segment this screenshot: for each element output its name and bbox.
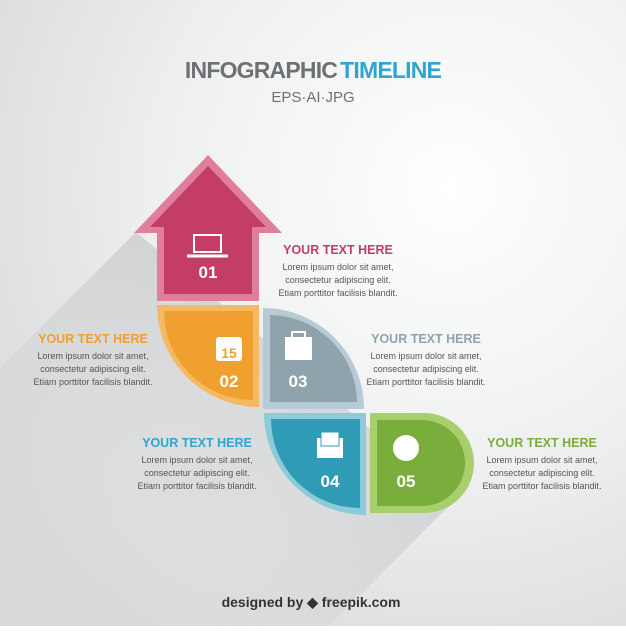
text 02: Etiam porttitor facilisis blandit. [33,377,153,387]
title [185,57,442,106]
step 05: 05 [397,472,415,491]
icon: bag [285,332,312,360]
text 05: Etiam porttitor facilisis blandit. [482,481,602,491]
step 01: arrow: 01 [199,263,217,282]
icon: laptop [187,235,228,256]
text 01: consectetur adipiscing elit. [285,275,391,285]
text 02 [33,332,153,387]
text 03: YOUR TEXT HERE [371,332,481,346]
shadow [0,232,455,626]
text 01: Etiam porttitor facilisis blandit. [278,288,398,298]
text 01 [278,243,398,298]
text 02: YOUR TEXT HERE [38,332,148,346]
text 03: Etiam porttitor facilisis blandit. [366,377,486,387]
title: INFOGRAPHICTIMELINE [185,57,442,83]
title: EPS·AI·JPG [271,89,355,106]
text 04 [137,436,257,491]
step 04: 04 [321,472,340,491]
icon: envelope [317,432,343,458]
text 03 [366,332,486,387]
text 05: Lorem ipsum dolor sit amet, [486,455,598,465]
text 01: YOUR TEXT HERE [283,243,393,257]
step 05 [370,413,474,513]
step 04 [264,413,366,515]
step 01: arrow [134,155,282,301]
text 03: consectetur adipiscing elit. [373,364,479,374]
step 03 [263,308,364,409]
step 02 [157,305,259,407]
step 03: 03 [289,372,307,391]
text 02: Lorem ipsum dolor sit amet, [37,351,149,361]
text 02: consectetur adipiscing elit. [40,364,146,374]
icon: globe [393,435,419,461]
text 04: consectetur adipiscing elit. [144,468,250,478]
footer credit: designed by ◆ freepik.com [222,594,400,610]
text 03: Lorem ipsum dolor sit amet, [370,351,482,361]
text 05: YOUR TEXT HERE [487,436,597,450]
text 05: consectetur adipiscing elit. [489,468,595,478]
step 02: 02 [220,372,238,391]
text 04: Lorem ipsum dolor sit amet, [141,455,253,465]
icon: calendar: 15 [221,345,237,361]
text 04: YOUR TEXT HERE [142,436,252,450]
text 01: Lorem ipsum dolor sit amet, [282,262,394,272]
text 05 [482,436,602,491]
text 04: Etiam porttitor facilisis blandit. [137,481,257,491]
